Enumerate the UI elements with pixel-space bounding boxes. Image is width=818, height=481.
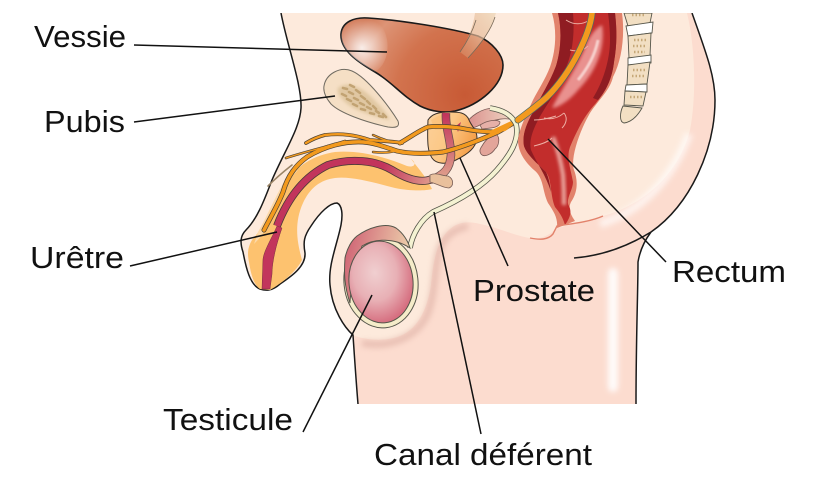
vas deferens canal xyxy=(410,108,517,248)
nerve crossing rectum xyxy=(518,13,592,120)
rectum highlights xyxy=(552,25,603,108)
label: Canal déférent: Canal déférent xyxy=(374,437,592,472)
testicle xyxy=(343,225,419,328)
testis body xyxy=(348,240,414,324)
body silhouette xyxy=(241,13,715,404)
scrotal envelope xyxy=(343,240,419,328)
nerves xyxy=(264,114,528,230)
bladder xyxy=(341,13,503,112)
nerve fills xyxy=(262,124,514,232)
label: Testicule: Testicule xyxy=(163,402,293,437)
rectum xyxy=(518,13,623,239)
nerve outlines xyxy=(262,124,514,232)
leader lines xyxy=(130,45,666,434)
leg shading xyxy=(352,13,715,404)
epididymis xyxy=(345,226,410,303)
label: Prostate: Prostate xyxy=(473,273,595,308)
urethra xyxy=(262,113,461,289)
catheter tube in bladder xyxy=(460,13,496,58)
anatomical illustration xyxy=(241,13,715,404)
corpus spongiosum orange band xyxy=(248,152,432,290)
prostate xyxy=(428,112,477,163)
seminal vesicle xyxy=(469,108,510,156)
vertebrae xyxy=(620,13,653,123)
rectum dark rim xyxy=(523,13,574,192)
label: Rectum: Rectum xyxy=(672,254,786,289)
label: Urêtre: Urêtre xyxy=(30,240,124,275)
label: Pubis: Pubis xyxy=(44,104,125,139)
pubis bone xyxy=(324,69,399,127)
label: Vessie: Vessie xyxy=(34,19,126,54)
anal verge xyxy=(530,216,603,239)
thigh highlight xyxy=(608,268,618,392)
thigh shadow xyxy=(362,226,468,344)
buttock highlight xyxy=(600,134,689,224)
